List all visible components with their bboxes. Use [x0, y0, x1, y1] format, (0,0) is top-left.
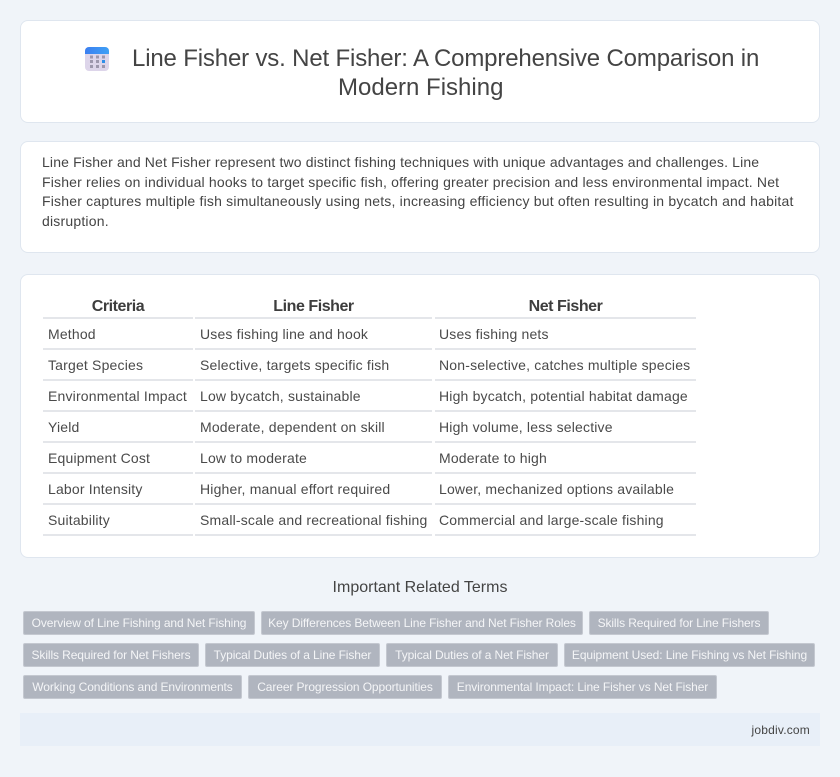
panel: comparison table: [20, 274, 820, 558]
related term tags: Typical Duties of a Net Fisher: [395, 648, 549, 662]
intro text: Fisher relies on individual hooks to target specific fish, offering greater precision and less environmental impact. Net: [42, 174, 779, 190]
intro text: Line Fisher and Net Fisher represent two distinct fishing techniques with unique advantages and challenges. Line: [42, 154, 759, 170]
comparison table: Labor Intensity: [48, 481, 143, 497]
comparison table: Small-scale and recreational fishing: [200, 512, 427, 528]
comparison table: Criteria: [92, 298, 144, 315]
comparison table: Net Fisher: [529, 298, 602, 315]
related term tags: Equipment Used: Line Fishing vs Net Fishing: [572, 648, 807, 662]
intro text: Fisher captures multiple fish simultaneously using nets, increasing efficiency but often resulting in bycatch and habitat: [42, 193, 794, 209]
comparison table: Moderate to high: [439, 450, 547, 466]
comparison table: Commercial and large-scale fishing: [439, 512, 664, 528]
related term tags: Career Progression Opportunities: [257, 680, 433, 694]
comparison table: Method: [48, 326, 96, 342]
comparison table: Uses fishing nets: [439, 326, 549, 342]
title: [132, 45, 759, 101]
comparison table: Equipment Cost: [48, 450, 150, 466]
comparison table: Line Fisher: [273, 298, 354, 315]
comparison table: [43, 298, 696, 536]
related term tags: Working Conditions and Environments: [32, 680, 233, 694]
panel: introduction: [20, 141, 820, 253]
comparison table: Low bycatch, sustainable: [200, 388, 361, 404]
comparison table: Lower, mechanized options available: [439, 481, 674, 497]
panel: header: [20, 20, 820, 123]
related term tags: [23, 611, 815, 699]
comparison table: Higher, manual effort required: [200, 481, 390, 497]
comparison table: Target Species: [48, 357, 143, 373]
icon: calendar: [85, 47, 109, 71]
comparison table: High volume, less selective: [439, 419, 613, 435]
related term tags: Typical Duties of a Line Fisher: [214, 648, 371, 662]
title: Modern Fishing: [338, 74, 503, 101]
comparison table: Yield: [48, 419, 80, 435]
comparison table: High bycatch, potential habitat damage: [439, 388, 688, 404]
comparison table: Uses fishing line and hook: [200, 326, 368, 342]
heading: related terms: Important Related Terms: [333, 579, 507, 596]
comparison table: Moderate, dependent on skill: [200, 419, 385, 435]
related term tags: Overview of Line Fishing and Net Fishing: [32, 616, 246, 630]
source credit: jobdiv.com: [752, 723, 810, 737]
intro text: [42, 154, 794, 229]
comparison table: Low to moderate: [200, 450, 307, 466]
comparison table: Selective, targets specific fish: [200, 357, 389, 373]
comparison table: Suitability: [48, 512, 110, 528]
related term tags: Environmental Impact: Line Fisher vs Net Fisher: [457, 680, 708, 694]
intro text: disruption.: [42, 213, 109, 229]
related term tags: Key Differences Between Line Fisher and Net Fisher Roles: [268, 616, 576, 630]
panel: footer: [20, 713, 820, 746]
comparison table: Environmental Impact: [48, 388, 187, 404]
related term tags: Skills Required for Net Fishers: [32, 648, 190, 662]
comparison table: Non-selective, catches multiple species: [439, 357, 690, 373]
related term tags: Skills Required for Line Fishers: [598, 616, 760, 630]
title: Line Fisher vs. Net Fisher: A Comprehensive Comparison in: [132, 45, 759, 72]
